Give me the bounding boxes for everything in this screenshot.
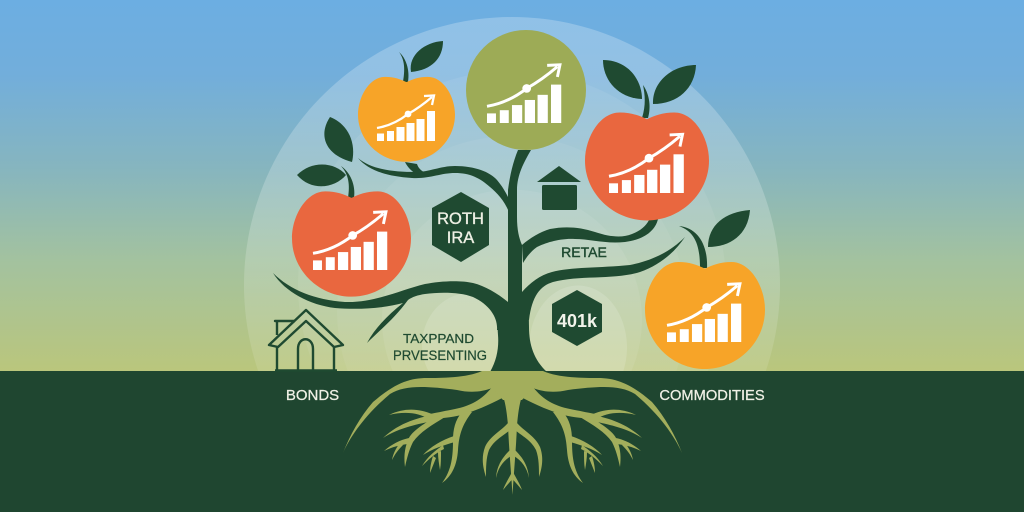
apple: red left: [292, 117, 411, 297]
label: tax text: PRVESENTING: [393, 348, 487, 363]
label: COMMODITIES: COMMODITIES: [659, 388, 765, 404]
label: BONDS: BONDS: [286, 387, 339, 404]
tree roots: [343, 371, 682, 495]
label: tax text: [393, 331, 487, 363]
apple: large red right: [585, 60, 709, 220]
ground: [0, 371, 1024, 512]
apple: small orange: [358, 41, 455, 162]
icon: small house block: [537, 166, 581, 210]
hexagon badge: Roth IRA: IRA: [447, 229, 474, 247]
circle fruit: olive green: [466, 30, 586, 150]
hexagon badge: 401k: [552, 290, 602, 346]
background halo circles: [244, 17, 780, 372]
label: tax text: TAXPPAND: [403, 331, 474, 346]
hexagon badge: 401k: 401k: [557, 311, 598, 331]
apple: orange right: [645, 210, 765, 369]
hexagon badge: Roth IRA: [432, 192, 489, 262]
icon: house outline: [269, 310, 343, 370]
hexagon badge: Roth IRA: ROTH: [437, 210, 484, 228]
tree trunk and branches: [273, 150, 685, 372]
background sky: [0, 0, 1024, 372]
label: RETAE: RETAE: [561, 244, 607, 260]
